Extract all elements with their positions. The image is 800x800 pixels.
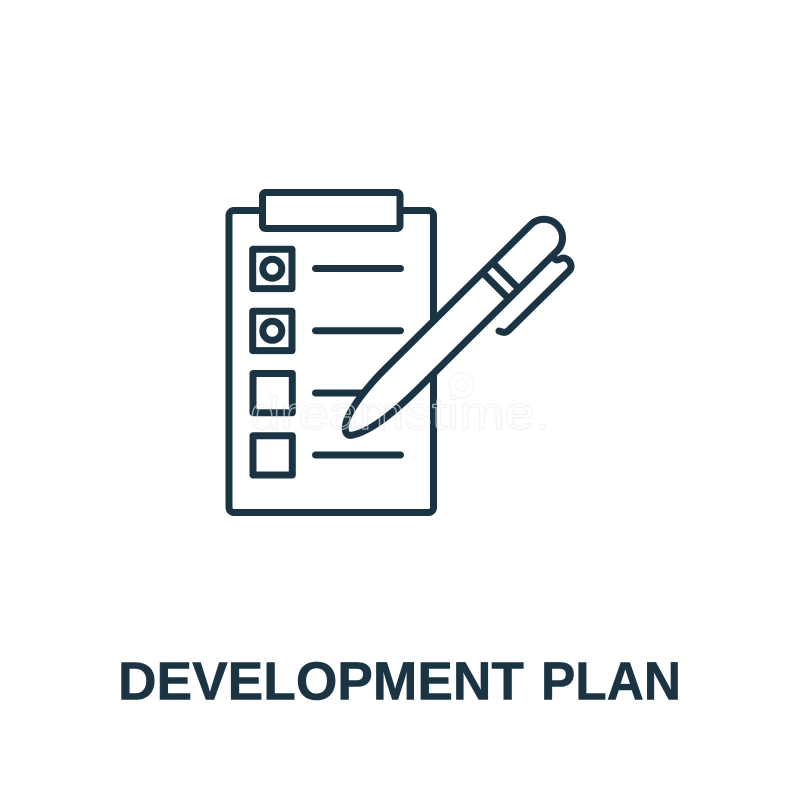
list line 3 xyxy=(316,390,400,396)
pen clip xyxy=(499,258,571,332)
clipboard board xyxy=(229,210,434,512)
list line 1 xyxy=(316,265,400,272)
icon: clipboard checklist xyxy=(229,192,434,512)
checkbox 3 empty xyxy=(253,374,292,413)
list line 4 xyxy=(316,452,400,458)
pen body xyxy=(345,219,563,435)
watermark: dreamstime. xyxy=(250,387,550,439)
title: PLAN xyxy=(541,652,681,712)
clipboard clip xyxy=(262,192,400,228)
watermark xyxy=(250,373,550,439)
list line 2 xyxy=(316,327,400,334)
checkbox 2 checked xyxy=(253,311,292,351)
checkbox 4 empty xyxy=(253,436,292,475)
icon: pen xyxy=(345,219,571,435)
checkbox 1 checked xyxy=(253,249,292,289)
title: DEVELOPMENT xyxy=(118,652,524,712)
pen band xyxy=(484,264,519,299)
